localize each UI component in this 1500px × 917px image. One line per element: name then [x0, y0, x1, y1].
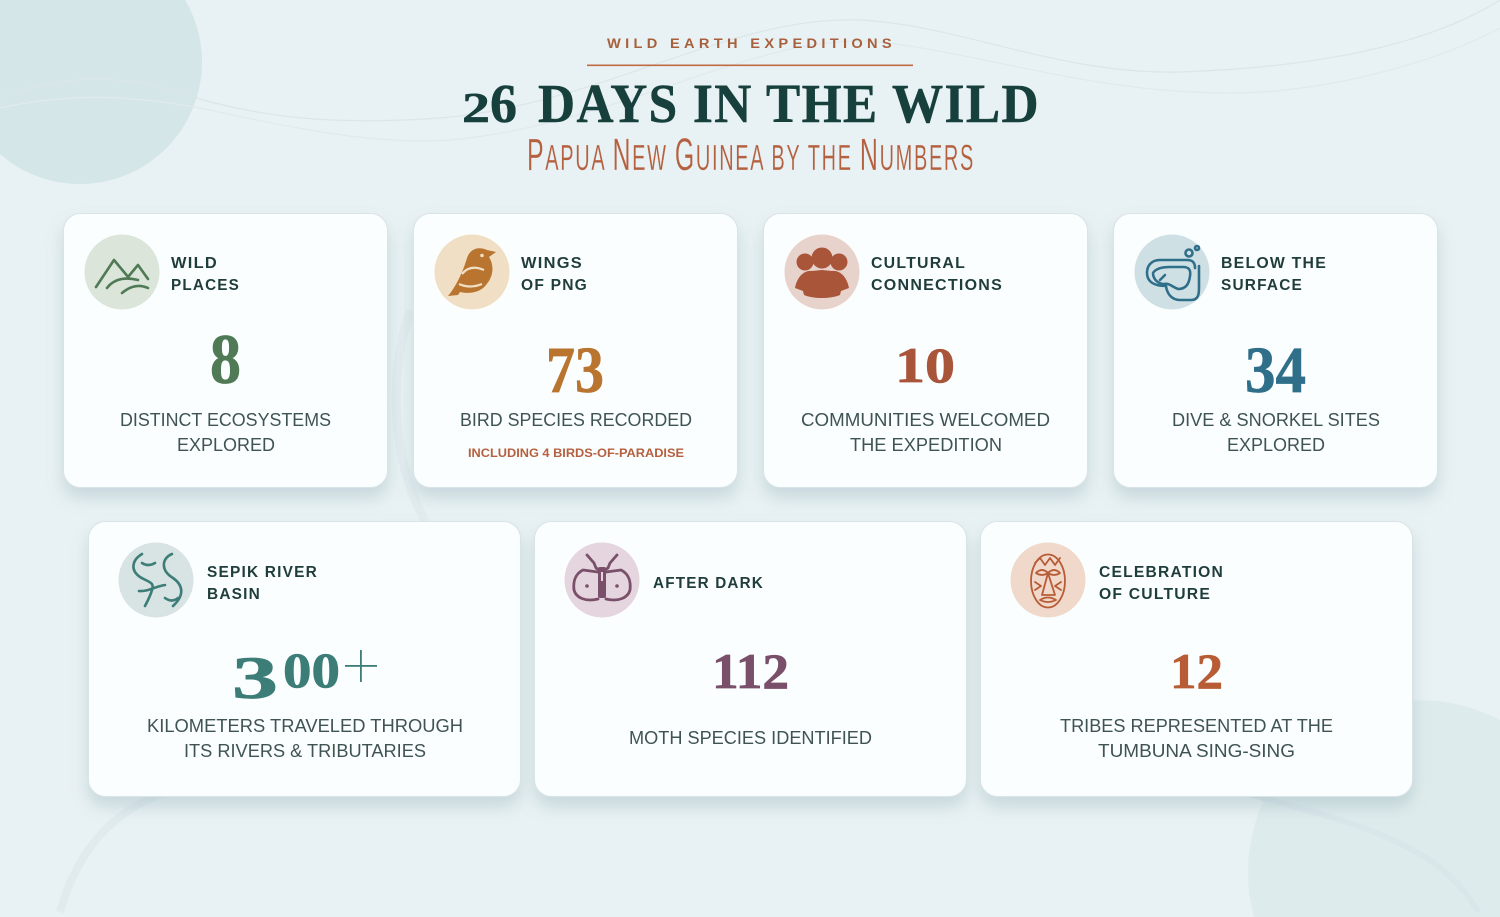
- panel: celebration of culture: [980, 522, 1412, 796]
- number: 34: [1245, 334, 1306, 407]
- heading: SURFACE: [1221, 277, 1303, 294]
- heading: PLACES: [171, 277, 240, 294]
- description: MOTH SPECIES IDENTIFIED: [629, 728, 872, 748]
- description: BIRD SPECIES RECORDED: [460, 410, 692, 430]
- note: INCLUDING 4 BIRDS-OF-PARADISE: [468, 446, 684, 460]
- icon: snorkel mask: [1134, 234, 1210, 310]
- panel: wings of PNG: [414, 214, 738, 488]
- icon: people: [784, 234, 860, 310]
- description: COMMUNITIES WELCOMED: [801, 410, 1050, 430]
- icon: bird: [434, 234, 510, 310]
- title: 2: [462, 86, 490, 132]
- heading: CULTURAL: [871, 255, 966, 272]
- heading: WINGS: [521, 255, 583, 272]
- number: 112: [712, 643, 789, 699]
- number: 12: [1170, 643, 1223, 699]
- title: DAYS IN THE WILD: [538, 73, 1040, 134]
- heading: OF PNG: [521, 277, 588, 294]
- panel: below the surface: [1114, 214, 1438, 488]
- icon: river: [118, 542, 194, 618]
- description: ITS RIVERS & TRIBUTARIES: [184, 741, 426, 761]
- number: 00: [283, 642, 340, 698]
- description: TRIBES REPRESENTED AT THE: [1060, 716, 1333, 736]
- icon: moth: [564, 542, 640, 618]
- description: EXPLORED: [177, 435, 275, 455]
- eyebrow: Wild Earth Expeditions: WILD EARTH EXPEDITIONS: [607, 36, 896, 51]
- heading: AFTER DARK: [653, 575, 764, 592]
- description: DISTINCT ECOSYSTEMS: [120, 410, 331, 430]
- description: EXPLORED: [1227, 435, 1325, 455]
- heading: OF CULTURE: [1099, 586, 1211, 603]
- panel: sepik river basin: [88, 522, 520, 796]
- icon: tribal mask: [1010, 542, 1086, 618]
- description: TUMBUNA SING-SING: [1098, 741, 1295, 761]
- heading: BASIN: [207, 586, 261, 603]
- number: 8: [210, 321, 241, 399]
- heading: WILD: [171, 255, 218, 272]
- subtitle: PAPUA NEW GUINEA BY THE NUMBERS: [527, 129, 975, 180]
- description: THE EXPEDITION: [850, 435, 1002, 455]
- heading: BELOW THE: [1221, 255, 1327, 272]
- heading: CONNECTIONS: [871, 277, 1003, 294]
- heading: CELEBRATION: [1099, 564, 1224, 581]
- panel: wild places: [64, 214, 388, 488]
- number: 3: [232, 645, 278, 711]
- panel: cultural connections: [764, 214, 1088, 488]
- description: DIVE & SNORKEL SITES: [1172, 410, 1380, 430]
- icon: mountains: [84, 234, 160, 310]
- title: 6: [490, 73, 517, 134]
- number: 73: [546, 334, 604, 407]
- panel: after dark: [534, 522, 966, 796]
- number: 10: [895, 337, 955, 393]
- heading: SEPIK RIVER: [207, 564, 318, 581]
- description: KILOMETERS TRAVELED THROUGH: [147, 716, 463, 736]
